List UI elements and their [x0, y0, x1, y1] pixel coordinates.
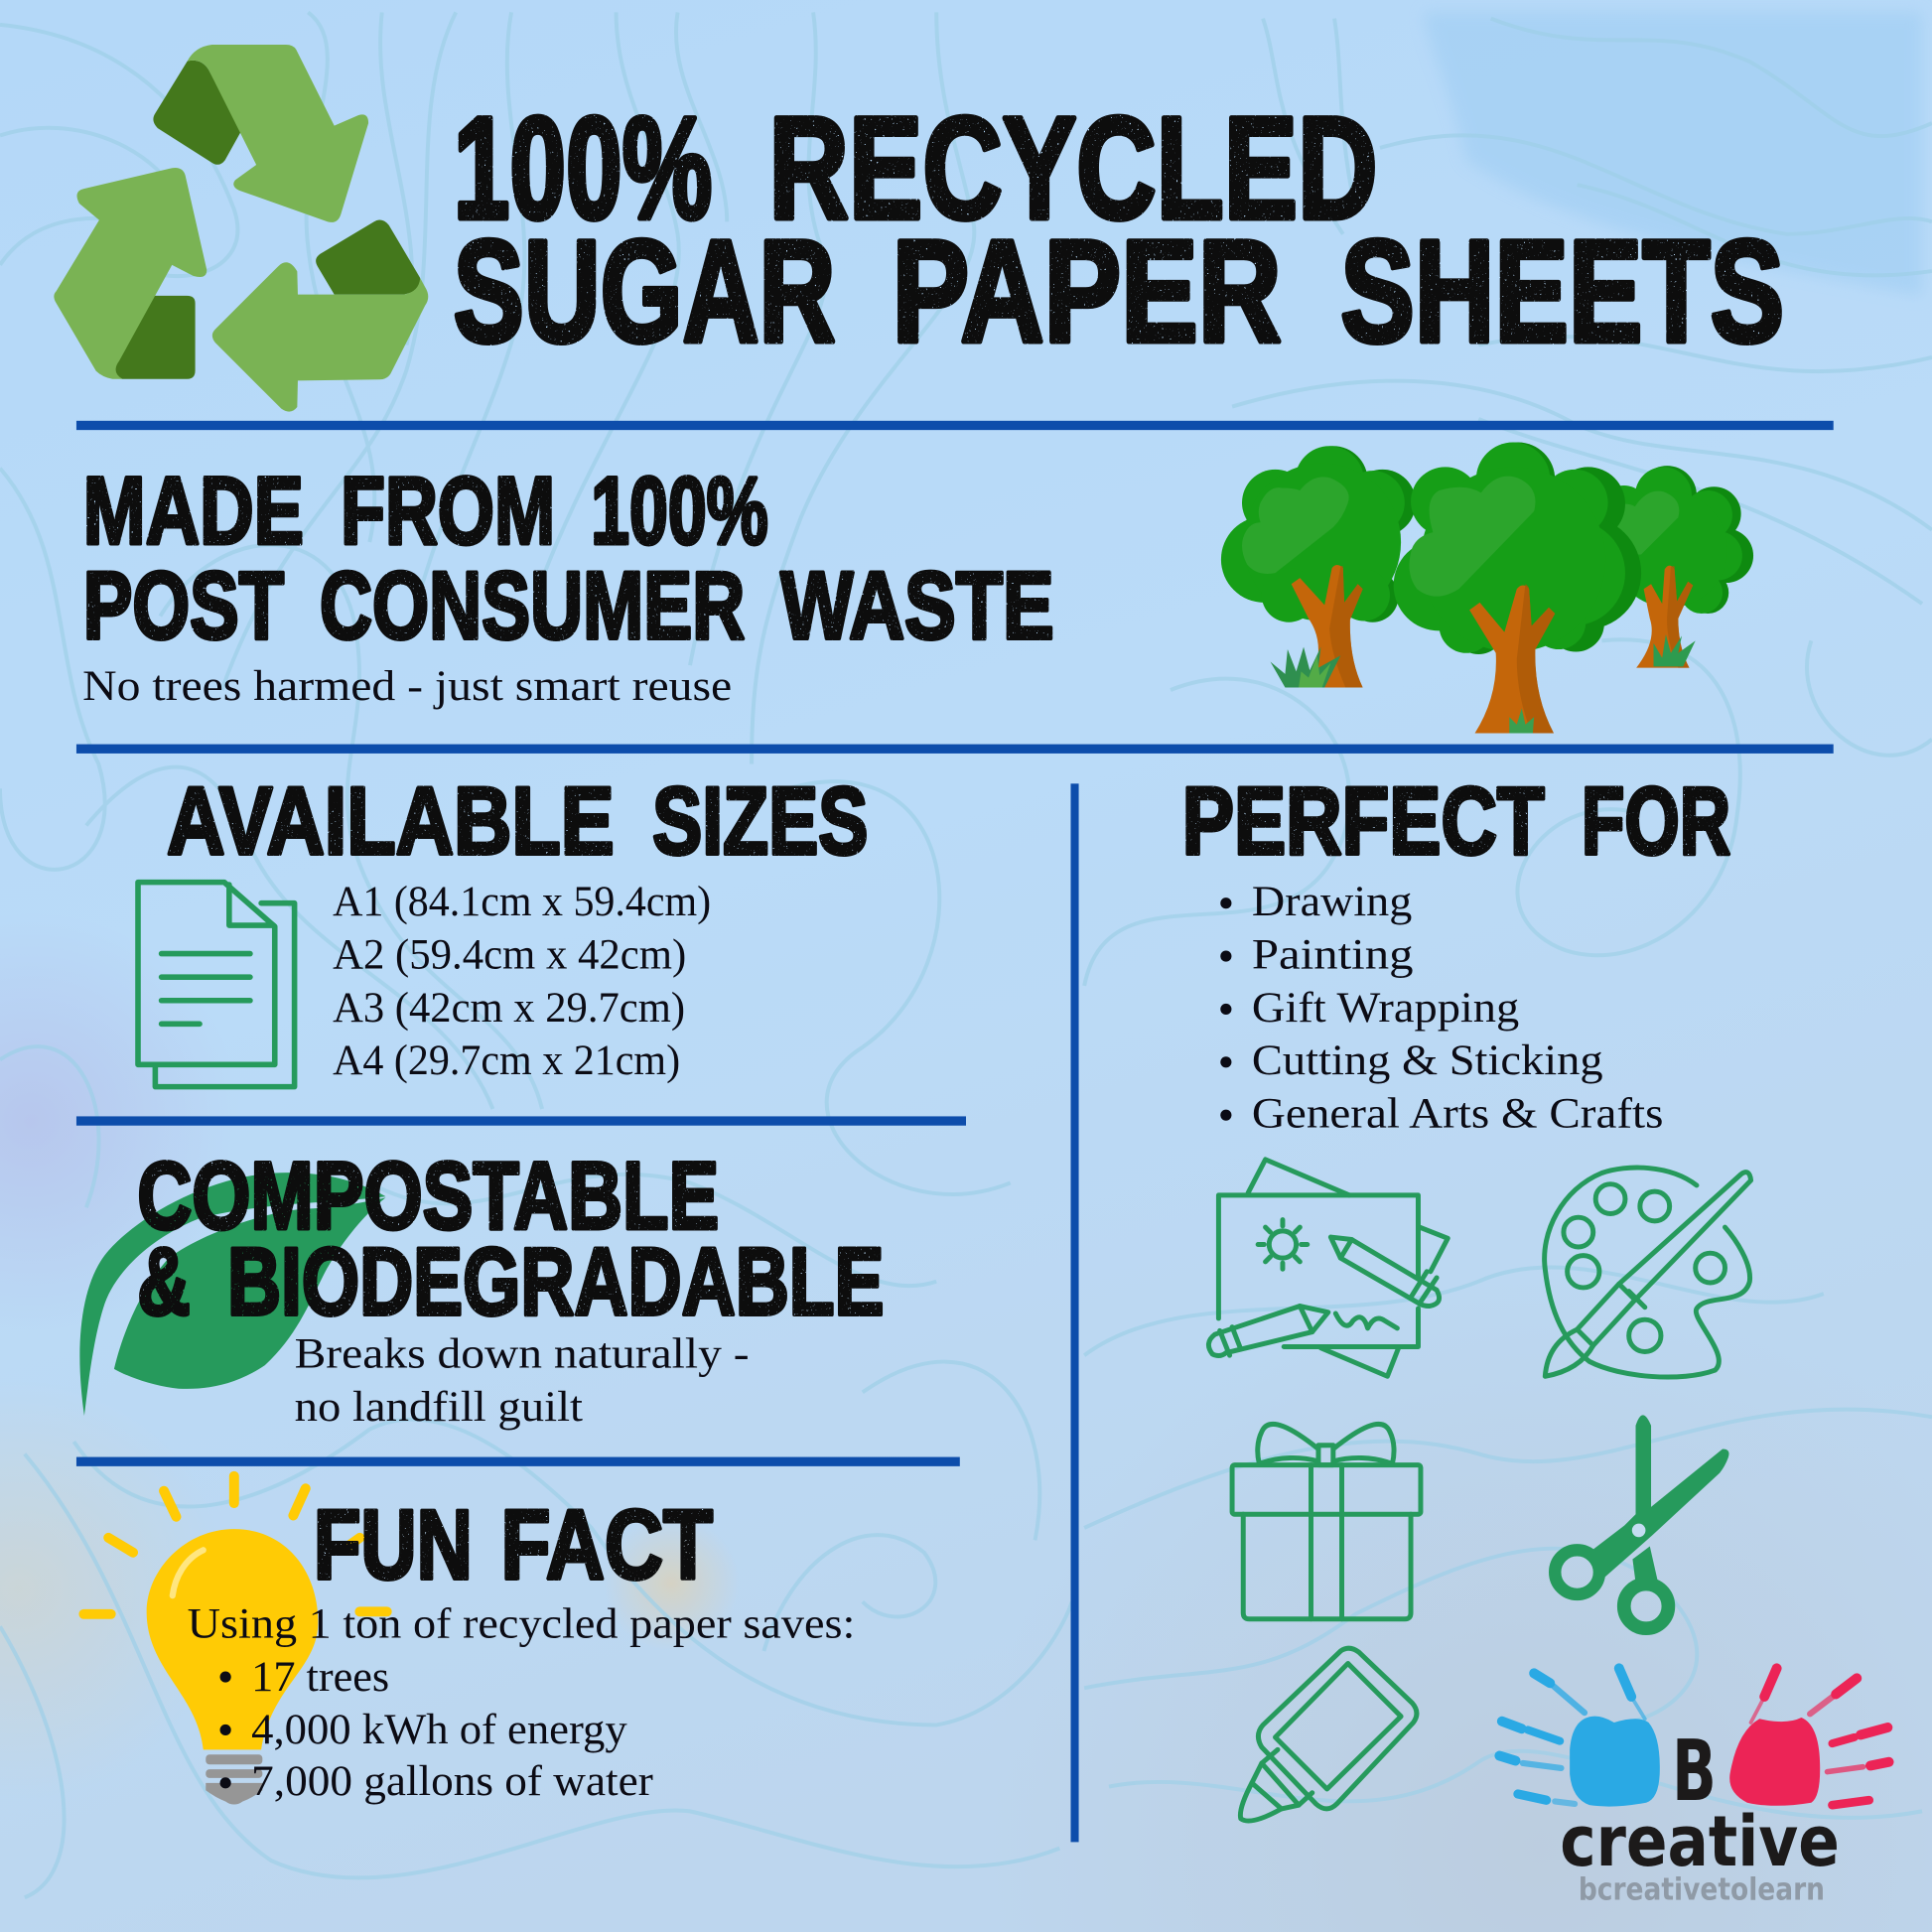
text: no trees harmed: No trees harmed - just smart reuse: [82, 662, 732, 710]
heading: available sizes: SIZES: [652, 766, 868, 875]
text: perfect for list: Cutting & Sticking: [1252, 1036, 1603, 1084]
icon: trees: [1221, 443, 1753, 733]
icon: gift: [1232, 1424, 1421, 1619]
heading: available sizes: AVAILABLE: [167, 766, 615, 875]
text: fun fact details: Using 1 ton of recycled paper saves:: [188, 1599, 855, 1647]
heading: made from post consumer waste: POST: [83, 551, 284, 659]
heading: perfect for: PERFECT: [1182, 766, 1545, 875]
text: fun fact details: [188, 1599, 855, 1805]
icon: documents: [138, 883, 295, 1087]
text: perfect for list: Drawing: [1252, 878, 1412, 925]
text: sizes list: A3 (42cm x 29.7cm): [333, 984, 685, 1032]
text: fun fact details: 17 trees: [251, 1653, 389, 1701]
icon: palette and brush: [1545, 1168, 1751, 1377]
heading: fun fact: FUN: [314, 1490, 473, 1600]
heading: compostable and biodegradable: BIODEGRADABLE: [227, 1227, 884, 1335]
title: RECYCLED: [768, 87, 1378, 250]
heading: fun fact: [314, 1490, 713, 1600]
icon: light bulb: [83, 1476, 387, 1805]
divider: compostable: [76, 1457, 960, 1466]
text: breaks down naturally: [295, 1330, 750, 1431]
text: breaks down naturally: no landfill guilt: [295, 1383, 583, 1431]
title: [454, 87, 1784, 373]
logo: b creative: creative: [1560, 1800, 1840, 1882]
text: breaks down naturally: Breaks down naturally -: [295, 1330, 750, 1378]
text: sizes list: A2 (59.4cm x 42cm): [333, 930, 686, 978]
heading: fun fact: FACT: [500, 1490, 713, 1600]
heading: made from post consumer waste: WASTE: [780, 551, 1054, 659]
icon: scissors: [1555, 1415, 1728, 1628]
title: SHEETS: [1340, 210, 1784, 373]
icon: drawing: [1208, 1160, 1448, 1376]
logo: b creative: bcreativetolearn: [1579, 1872, 1825, 1908]
heading: made from post consumer waste: 100%: [591, 456, 768, 564]
heading: made from post consumer waste: [83, 456, 1054, 659]
icon: leaf: [79, 1173, 385, 1416]
heading: compostable and biodegradable: [137, 1141, 884, 1335]
text: perfect for list: [1220, 878, 1663, 1138]
text: perfect for list: Painting: [1252, 930, 1414, 978]
hand: blue: [1499, 1668, 1660, 1807]
icon: glue bottle: [1240, 1648, 1417, 1821]
text: sizes list: A1 (84.1cm x 59.4cm): [333, 878, 711, 925]
divider: sizes: [76, 1116, 966, 1126]
icon: recycle symbol: [54, 45, 428, 412]
title: PAPER: [893, 210, 1282, 373]
text: sizes list: A4 (29.7cm x 21cm): [333, 1036, 680, 1084]
text: fun fact details: 4,000 kWh of energy: [251, 1706, 627, 1753]
heading: made from post consumer waste: MADE: [83, 456, 304, 564]
text: fun fact details: 7,000 gallons of water: [251, 1757, 653, 1805]
text: sizes list: [333, 878, 711, 1084]
heading: made from post consumer waste: FROM: [341, 456, 555, 564]
title: SUGAR: [454, 210, 835, 373]
divider: middle: [76, 745, 1834, 754]
logo: b creative: B: [1672, 1723, 1717, 1820]
text: perfect for list: General Arts & Crafts: [1252, 1090, 1663, 1138]
logo: b creative: [1499, 1668, 1889, 1908]
heading: compostable and biodegradable: &: [137, 1227, 191, 1335]
heading: perfect for: FOR: [1582, 766, 1730, 875]
title: 100%: [454, 87, 712, 250]
divider: top: [76, 421, 1834, 430]
heading: compostable and biodegradable: COMPOSTABLE: [137, 1141, 719, 1249]
divider: vertical: [1070, 783, 1079, 1842]
heading: made from post consumer waste: CONSUMER: [320, 551, 745, 659]
text: perfect for list: Gift Wrapping: [1252, 984, 1519, 1032]
